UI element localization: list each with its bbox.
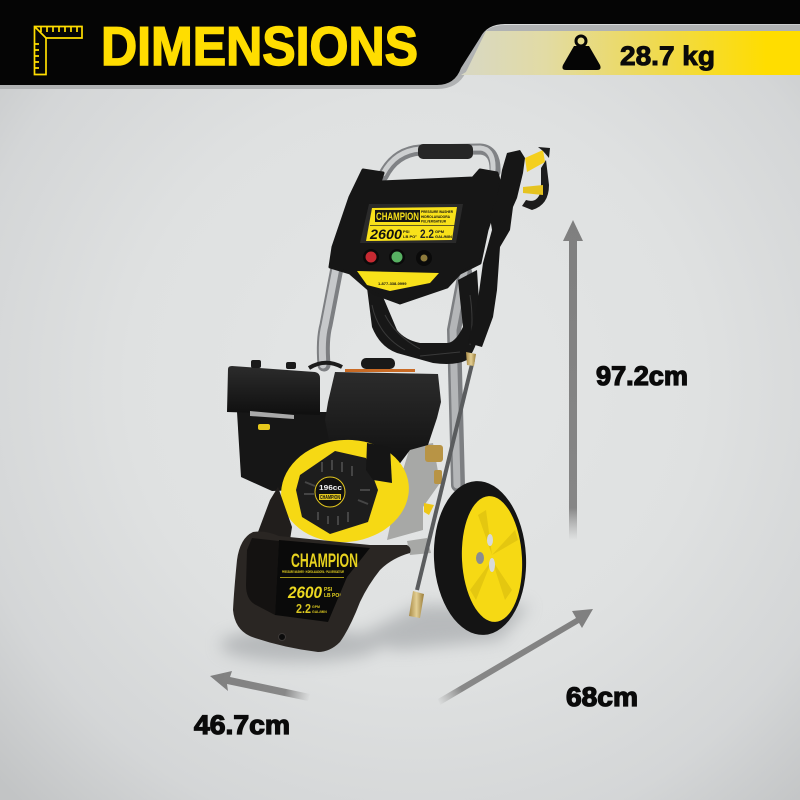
choke lever (258, 424, 270, 430)
pull housing (366, 443, 392, 483)
spray lance (417, 360, 473, 590)
depth label: 46.7cm (194, 710, 290, 740)
cradle label: GPM (312, 605, 320, 609)
pump (387, 443, 440, 540)
yellow fitting (424, 503, 434, 515)
lance fitting (466, 352, 476, 366)
cradle label: CHAMPION (291, 551, 358, 572)
handle grip (418, 144, 473, 159)
recoil ring (276, 434, 414, 548)
height arrow (563, 220, 583, 540)
icon: carpenter square (34, 26, 82, 74)
control panel (330, 170, 501, 303)
196cc badge: 196cc (319, 483, 342, 492)
depth arrow (210, 671, 310, 701)
brass fittings (425, 445, 443, 484)
header band (0, 0, 800, 89)
width label: 68cm (566, 682, 638, 712)
fuel tank (325, 372, 441, 470)
air box caps (251, 360, 342, 369)
wheel (430, 479, 530, 637)
cradle interior (246, 538, 279, 615)
weight value: 28.7 kg (620, 41, 715, 71)
frame tubes (322, 148, 495, 485)
cradle bolt (278, 634, 286, 640)
cradle label: PSI (324, 587, 333, 593)
width arrow (438, 609, 593, 705)
air box trim (250, 411, 294, 419)
cover vents (304, 460, 370, 525)
panel label: GAL/MIN (435, 234, 452, 239)
panel label: HIDROLAVADORA (421, 215, 450, 219)
panel label: GPM (435, 229, 445, 234)
196cc badge (315, 477, 345, 507)
panel label: LB PO² (403, 234, 417, 239)
brass nozzle (409, 591, 424, 618)
cradle label: LB PO² (324, 593, 341, 599)
cradle label: 2600 (287, 583, 322, 602)
yellow weight band (461, 31, 800, 75)
frame connector (407, 538, 431, 555)
panel label (360, 204, 463, 243)
panel label: 2600 (369, 226, 402, 242)
fuel cap (345, 358, 415, 372)
title: DIMENSIONS (101, 15, 418, 77)
cradle label: GAL/MIN (312, 610, 327, 614)
hose coil (366, 270, 480, 364)
panel label: PULVERISATEUR (421, 220, 446, 224)
panel label: PSI (403, 229, 409, 234)
cradle label: 2.2 (296, 601, 311, 616)
height label: 97.2cm (596, 361, 688, 391)
196cc badge: CHAMPION (320, 495, 340, 501)
engine lower block (237, 412, 345, 491)
nozzle buttons (363, 249, 432, 266)
pressure washer (227, 144, 550, 652)
cradle label (275, 540, 370, 622)
panel label: PRESSURE WASHER (421, 210, 453, 214)
recoil cover (296, 451, 378, 534)
frame cradle (233, 532, 411, 652)
floor shadow (220, 605, 530, 662)
panel label: CHAMPION (376, 211, 419, 223)
icon: weight (562, 36, 601, 70)
cradle label: PRESSURE WASHER · HIDROLAVADORA · PULVERISATEUR (282, 570, 344, 574)
panel yellow strip (357, 271, 439, 291)
frame arm (258, 487, 292, 540)
spray gun (468, 147, 550, 347)
panel yellow strip: 1-877-338-0999 (378, 281, 407, 286)
engine air box (227, 366, 320, 415)
panel label: 2.2 (420, 227, 434, 241)
